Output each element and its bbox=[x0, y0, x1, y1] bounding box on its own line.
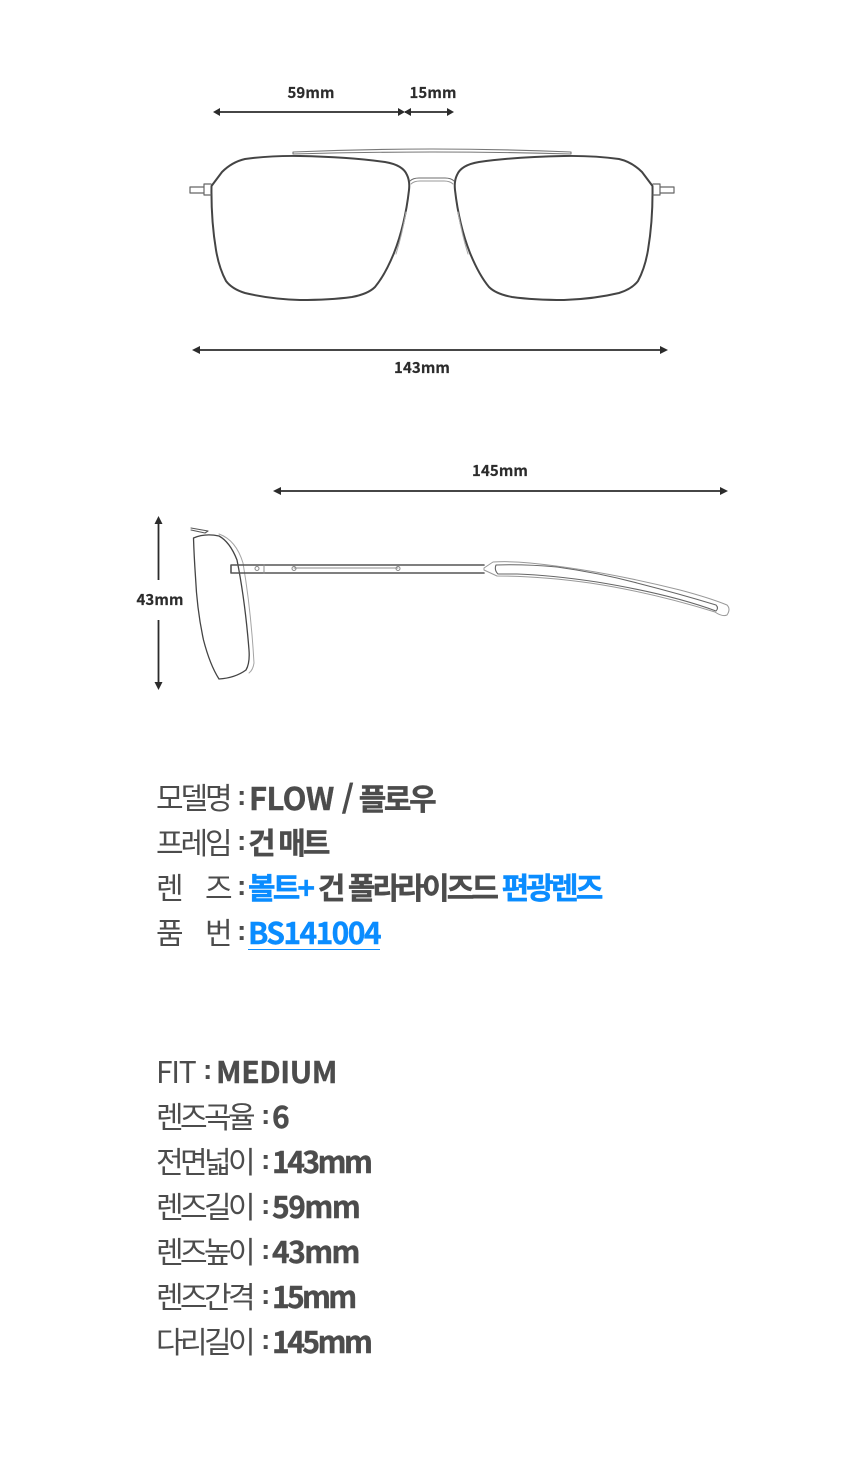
row: fit bbox=[156, 1048, 337, 1092]
row: lens height: 43mm bbox=[272, 1228, 359, 1272]
nose bridge bbox=[410, 178, 454, 181]
row: lens length: 59mm bbox=[272, 1183, 359, 1227]
row: lens: 볼트+ 건 폴라라이즈드 편광렌즈 bbox=[248, 864, 600, 908]
row: front width bbox=[156, 1138, 371, 1182]
row: frame: 프레임 bbox=[156, 819, 230, 863]
row: lens length bbox=[156, 1183, 359, 1227]
icon: glasses front outline bbox=[190, 149, 674, 300]
diagram: front view of glasses with dimensions bbox=[189, 82, 675, 378]
nose pads bbox=[396, 212, 406, 254]
row: front width: 전면넓이 bbox=[156, 1138, 252, 1182]
dimension: lens height 43mm bbox=[136, 516, 184, 690]
row: model name: FLOW / 플로우 bbox=[249, 774, 434, 819]
dimension: bridge width 15mm bbox=[404, 82, 457, 116]
text block: product info bbox=[156, 774, 602, 953]
row: lens: : bbox=[237, 870, 246, 901]
dimension: bridge width 15mm: 15mm bbox=[409, 82, 457, 103]
row: lens length: : bbox=[261, 1189, 270, 1220]
row: product number: 품 bbox=[156, 909, 184, 953]
row: front width: 143mm bbox=[272, 1138, 370, 1182]
dimension: lens width 59mm: 59mm bbox=[287, 82, 335, 103]
temple tip inner bbox=[495, 565, 718, 611]
row: model name: : bbox=[237, 780, 246, 811]
dimension: total width 143mm: 143mm bbox=[394, 357, 450, 378]
temple arm bbox=[231, 565, 484, 573]
row: temple length: : bbox=[261, 1324, 270, 1355]
row: fit: MEDIUM bbox=[216, 1048, 337, 1092]
row: product number bbox=[156, 909, 381, 953]
diagram: side view of glasses with dimensions bbox=[136, 460, 730, 690]
row: front width: : bbox=[261, 1144, 270, 1175]
row: lens gap bbox=[156, 1273, 356, 1317]
row: product number: : bbox=[237, 915, 246, 946]
row: product number: BS141004 bbox=[248, 909, 380, 953]
right lens bbox=[455, 156, 653, 300]
row: product number: 번 bbox=[205, 909, 233, 953]
text block: fit and measurements bbox=[156, 1048, 371, 1362]
row: frame: : bbox=[237, 825, 246, 856]
row: lens gap: 렌즈간격 bbox=[156, 1273, 252, 1317]
top bar bbox=[293, 149, 571, 154]
row: lens: 즈 bbox=[205, 864, 233, 908]
row: frame: 건 매트 bbox=[248, 819, 328, 863]
dimension: total width 143mm bbox=[192, 346, 668, 378]
icon: glasses side outline bbox=[191, 528, 729, 679]
row: model name bbox=[156, 774, 436, 819]
temple tip outer bbox=[484, 562, 729, 616]
row: lens curve: 6 bbox=[272, 1093, 287, 1137]
lens side outer bbox=[194, 535, 249, 679]
row: lens curve: 렌즈곡율 bbox=[156, 1093, 252, 1137]
dimension: lens height 43mm: 43mm bbox=[136, 589, 184, 610]
row: fit: : bbox=[203, 1054, 212, 1085]
row: lens height: : bbox=[261, 1234, 270, 1265]
row: temple length bbox=[156, 1318, 371, 1362]
row: lens gap: 15mm bbox=[272, 1273, 354, 1317]
row: model name: 모델명 bbox=[156, 774, 230, 818]
row: temple length: 145mm bbox=[272, 1318, 370, 1362]
left lens bbox=[211, 156, 409, 300]
row: lens: 렌 bbox=[156, 864, 184, 908]
row: frame bbox=[156, 819, 330, 863]
row: lens height: 렌즈높이 bbox=[156, 1228, 252, 1272]
row: lens length: 렌즈길이 bbox=[156, 1183, 252, 1227]
dimension: temple length 145mm: 145mm bbox=[472, 460, 528, 481]
row: lens gap: : bbox=[261, 1279, 270, 1310]
row: temple length: 다리길이 bbox=[156, 1318, 252, 1362]
right hinge bbox=[653, 184, 674, 195]
left hinge bbox=[190, 184, 211, 195]
row: lens curve: : bbox=[261, 1099, 270, 1130]
row: fit: FIT bbox=[156, 1048, 195, 1092]
top bar tip bbox=[191, 528, 208, 533]
dimension: temple length 145mm bbox=[273, 460, 728, 495]
lens side rim highlight bbox=[219, 534, 254, 673]
row: lens height bbox=[156, 1228, 359, 1272]
dimension: lens width 59mm bbox=[213, 82, 405, 116]
